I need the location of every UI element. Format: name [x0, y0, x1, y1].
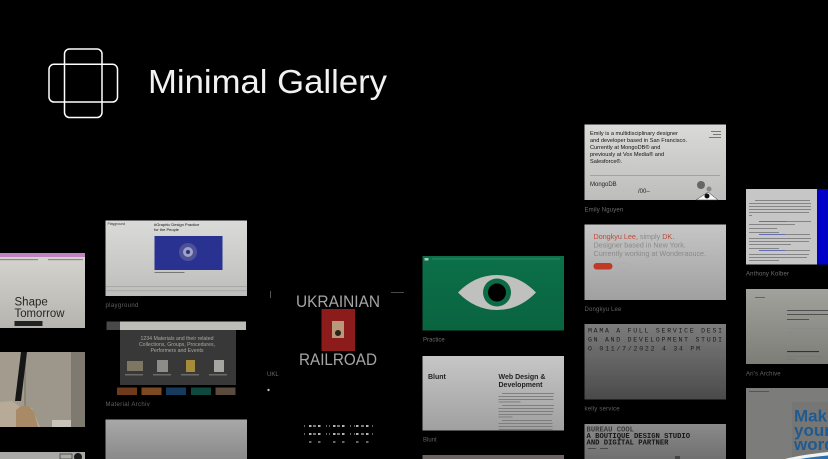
dotted pattern rows	[304, 425, 373, 443]
panel: photo card	[0, 352, 85, 427]
panel: blank grey card	[106, 420, 247, 459]
panel: Material Archiv card	[106, 322, 246, 395]
panel: Emily Nguyen card: previously at Vox Media® and	[590, 151, 664, 158]
panel: playground card: for the People	[154, 227, 180, 232]
panel: Ukrainian Railroad card: RAILROAD	[299, 350, 377, 369]
panel: Emily Nguyen card: Salesforce®.	[590, 158, 623, 165]
panel: Kelly Service card: O 011/7/2022 4 34 PM	[588, 346, 700, 352]
panel: playground card	[106, 220, 247, 296]
panel: Emily Nguyen card: and developer based in San Francisco.	[590, 138, 687, 144]
panel: Ari's Archive card	[746, 289, 828, 364]
panel: Material Archiv card: 1234 Materials and their related	[141, 336, 214, 342]
panel: Practice eye card	[422, 256, 564, 330]
label: Anthony Kolber: Anthony Kolber	[746, 272, 789, 278]
panel: Ukrainian Railroad card: UKRAINIAN	[296, 292, 380, 311]
panel: Kelly Service card: MAMA A FULL SERVICE DESI	[588, 328, 722, 334]
panel: Material Archiv card: Collections, Groups, Procedures,	[139, 342, 215, 348]
panel: Bureau Cool card: A BOUTIQUE DESIGN STUDIO	[586, 433, 691, 441]
label: Blunt: Blunt	[423, 438, 437, 444]
label: playground: playground	[106, 303, 139, 309]
panel: Dongkyu Lee card	[584, 224, 726, 300]
label: Material Archiv: Material Archiv	[106, 402, 150, 408]
panel: Shape Tomorrow card	[0, 253, 85, 328]
logo icon: overlapping rounded rectangles	[49, 49, 118, 118]
panel: Blunt card	[422, 356, 564, 430]
title: Minimal Gallery	[148, 63, 388, 100]
panel: Blunt card: Development	[498, 382, 543, 389]
panel: Emily Nguyen card: MongoDB	[590, 182, 617, 188]
panel: Bureau Cool card: AND DIGITAL PARTNER	[586, 440, 669, 448]
marker dot	[267, 389, 270, 391]
panel: Kelly Service card	[584, 324, 726, 400]
label: Emily Nguyen: Emily Nguyen	[584, 208, 623, 214]
label: Practice: Practice	[423, 338, 445, 344]
panel: Dongkyu Lee card: Designer based in New York.	[594, 240, 686, 250]
panel: Blunt card: Web Design &	[498, 374, 545, 381]
panel: Emily Nguyen card: Currently at MongoDB® and	[590, 144, 660, 151]
panel: Bureau Cool card: BUREAU COOL	[586, 426, 634, 434]
label: Dongkyu Lee: Dongkyu Lee	[584, 307, 622, 313]
panel: Anthony Kolber card	[746, 189, 828, 264]
panel: Emily Nguyen card: Emily is a multidisciplinary designer	[590, 131, 678, 137]
panel: playground card: #Graphic Design Practice	[154, 222, 200, 227]
panel: Emily Nguyen card: /00–	[638, 189, 650, 195]
panel: Material Archiv card: Performers and Events	[150, 348, 204, 354]
panel: playground card: Playground	[108, 222, 125, 226]
panel: Dongkyu Lee card: Currently working at Wonderaouce.	[594, 249, 706, 258]
label: Kelly Service: kelly service	[584, 406, 620, 412]
panel: Kelly Service card: GN AND DEVELOPMENT STUDI	[588, 336, 722, 344]
panel: Bureau Cool card	[584, 424, 726, 459]
panel: Make your words card	[746, 388, 828, 459]
panel: Ukrainian Railroad card	[270, 291, 404, 369]
label: Ari's Archive: Ari's Archive	[746, 372, 781, 378]
panel: partial card bottom left	[0, 452, 85, 459]
label: UKL: UKL	[267, 372, 279, 378]
panel: Blunt card: Blunt	[428, 374, 447, 381]
panel: Dongkyu Lee card: Dongkyu Lee, simply DK.	[594, 232, 674, 241]
panel: Shape Tomorrow card: Tomorrow	[14, 308, 65, 320]
panel: Emily Nguyen card	[584, 124, 726, 200]
panel: Shape Tomorrow card: Shape	[14, 296, 48, 308]
panel: partial card below Blunt	[422, 455, 564, 459]
icon: eye	[458, 275, 536, 310]
